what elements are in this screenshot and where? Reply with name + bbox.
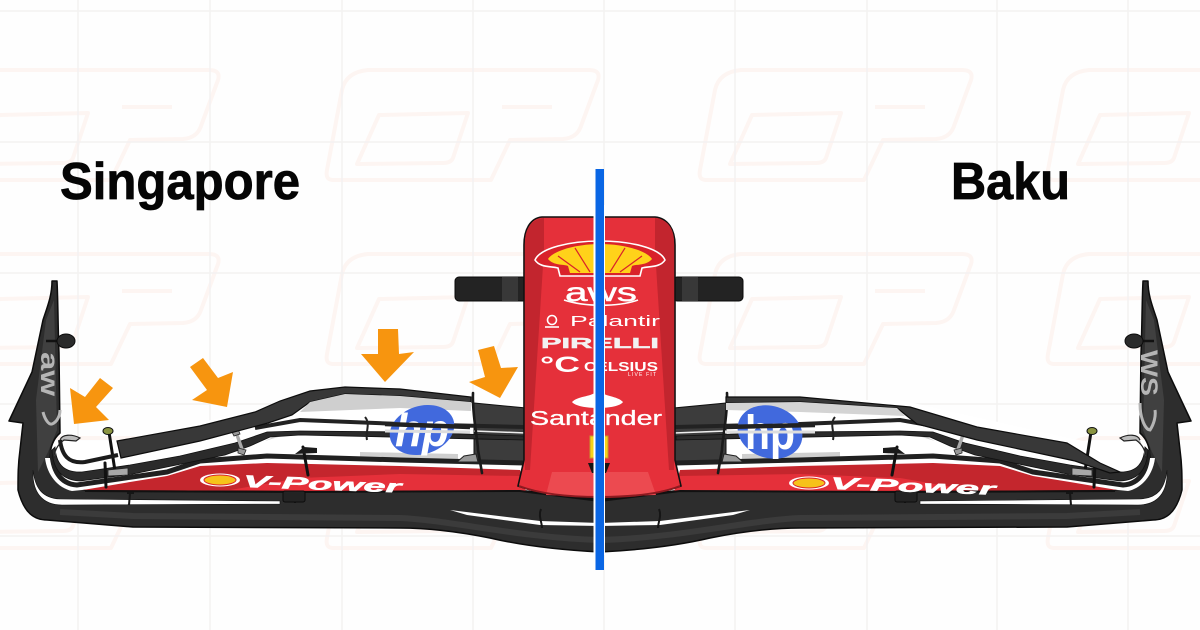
- endplate shading: [36, 300, 57, 472]
- left endplate lettering: aw: [35, 352, 63, 397]
- nose tip highlight: [546, 472, 656, 497]
- Santander logo: Santander: [530, 408, 662, 430]
- Palantir logo: Palantir: [570, 313, 660, 330]
- left V-Power livery: [200, 472, 405, 497]
- endplate pod: [46, 334, 75, 348]
- right V-Power livery: V-Power: [830, 474, 999, 499]
- small strut: [365, 417, 368, 440]
- nose body: [518, 217, 681, 498]
- arrow: flap peak: [361, 329, 414, 382]
- Shell logo: [535, 241, 665, 276]
- right nose pylon pod: [673, 277, 743, 301]
- white line by panels: [474, 431, 526, 433]
- endplate and main plane: [9, 281, 600, 552]
- olive-tipped strut: [103, 428, 128, 487]
- Palantir logo: [545, 313, 660, 330]
- Pirelli logo: PIRELLI: [541, 335, 659, 352]
- left HP logo: hp: [395, 404, 449, 456]
- thin upper line: [255, 420, 525, 428]
- Celsius logo: CELSIUS: [584, 359, 658, 374]
- centre dark panels: [474, 403, 526, 462]
- right upper flap: [726, 397, 1120, 473]
- plane edge line: [85, 491, 600, 501]
- red plane: [83, 463, 526, 492]
- grey clamp: [232, 429, 246, 455]
- main plane highlight: [60, 512, 600, 540]
- left V-Power livery: V-Power: [243, 472, 405, 497]
- nose side shading left: [525, 218, 544, 470]
- second white slot: [45, 458, 92, 491]
- grey shading under slat: [360, 452, 458, 459]
- lower white slot: [33, 470, 280, 505]
- left nose pylon pod: [455, 277, 527, 301]
- clip box: [283, 491, 305, 502]
- right V-Power livery: [789, 474, 999, 499]
- Celsius logo: LIVE FIT: [628, 372, 656, 378]
- third slat: [52, 450, 525, 485]
- left HP logo: [383, 397, 470, 463]
- nose side shading right: [655, 218, 674, 470]
- nose cone: [518, 217, 681, 498]
- heading: Baku: Baku: [951, 153, 1070, 211]
- arrow: outer flap: [190, 358, 233, 407]
- right endplate lettering: [1135, 350, 1162, 430]
- right endplate lettering: WS: [1135, 350, 1162, 396]
- strut with flag: [295, 447, 317, 475]
- red plane bright strip: [230, 474, 526, 492]
- white backing of wing: [50, 400, 600, 530]
- Santander logo: [530, 389, 662, 430]
- grey shading under upper flap: [265, 431, 470, 441]
- heading: Singapore: Singapore: [60, 153, 300, 211]
- aws logo: aws: [565, 277, 637, 307]
- foot bracket: [457, 454, 478, 462]
- endplate bracket: [54, 435, 80, 458]
- arrow: endplate junction: [70, 378, 113, 424]
- black camera mount: [588, 463, 610, 473]
- Celsius logo: °C: [540, 352, 580, 377]
- yellow marker: [590, 436, 608, 458]
- strut: [473, 393, 482, 473]
- right HP logo: [725, 397, 815, 467]
- white strip above red plane: [110, 460, 520, 481]
- aws logo: [564, 277, 638, 307]
- left half of front wing: Singapore: [9, 281, 600, 552]
- lower plane clips: [127, 492, 542, 528]
- centre white slot: [450, 510, 600, 526]
- left upper flap: [60, 387, 471, 462]
- divider: comparison line: [594, 169, 605, 570]
- left endplate lettering: [35, 352, 63, 424]
- Celsius logo: [540, 352, 658, 378]
- fourth slat: [52, 431, 524, 481]
- nose bottom flange: [519, 486, 680, 497]
- right HP logo: hp: [745, 407, 795, 460]
- right half of front wing: Baku: [600, 281, 1191, 552]
- arrow: inner flap: [469, 346, 518, 398]
